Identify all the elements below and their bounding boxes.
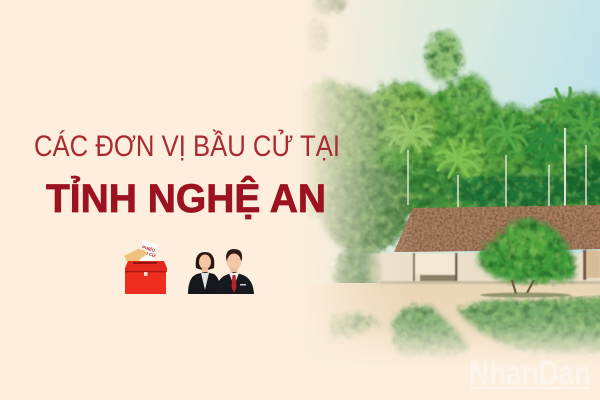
- box lid: [125, 261, 167, 272]
- ballot paper: BẦU CỬ: [138, 249, 157, 259]
- icon: female and male delegates: [188, 249, 254, 294]
- ballot paper: [135, 240, 159, 268]
- tree shadow: [480, 292, 570, 298]
- ballot paper: PHIẾU: [141, 244, 156, 253]
- sky: [330, 0, 600, 283]
- ground: [322, 283, 600, 352]
- woman: [188, 252, 222, 294]
- photo: Kim Lien village with thatched house and palm trees: [305, 0, 600, 389]
- house walls: [360, 250, 600, 284]
- cream bottom band: [322, 366, 600, 367]
- fade to cream at the bottom: [322, 298, 600, 365]
- garden bushes: [330, 298, 600, 356]
- palm trunks: [408, 128, 586, 207]
- tree trunk: [512, 280, 534, 294]
- hand: [124, 249, 147, 263]
- thatched roof: [394, 205, 600, 252]
- box body: [125, 271, 166, 294]
- icon: hand dropping ballot into red box: [124, 240, 167, 294]
- man: [216, 249, 254, 294]
- palm crowns: [388, 88, 600, 177]
- tree mass: [290, 0, 600, 296]
- heading line 2: TỈNH NGHỆ AN: [46, 175, 326, 221]
- round tree: [479, 219, 575, 283]
- fade to cream on the left: [300, 0, 407, 352]
- heading line 1: CÁC ĐƠN VỊ BẦU CỬ TẠI: [34, 129, 340, 163]
